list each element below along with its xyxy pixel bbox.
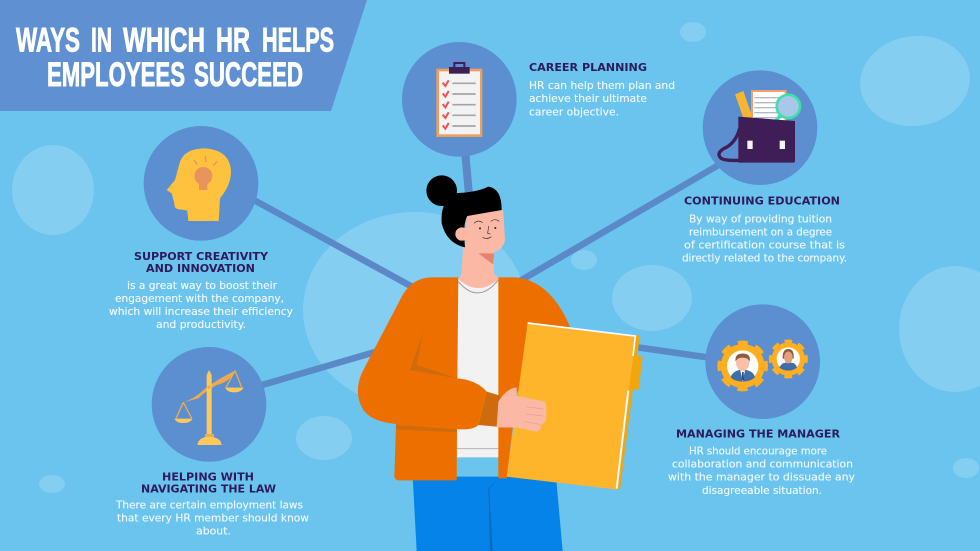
text: support creativity: which will increase their efficiency xyxy=(109,306,293,318)
title: SUCCEED xyxy=(194,56,303,94)
text: navigating the law xyxy=(115,470,309,538)
text: navigating the law: NAVIGATING THE LAW xyxy=(141,482,276,496)
text: managing the manager: disagreeable situation. xyxy=(702,485,822,497)
text: managing the manager: HR should encourage more xyxy=(689,446,827,458)
panel: career planning icon xyxy=(402,42,517,157)
text: navigating the law: that every HR member should know xyxy=(117,512,309,524)
title: HR xyxy=(216,22,250,60)
text: support creativity: engagement with the company, xyxy=(115,293,284,305)
text: continuing education xyxy=(682,194,847,264)
text: navigating the law: about. xyxy=(196,526,231,538)
title xyxy=(16,22,334,94)
title: EMPLOYEES xyxy=(47,56,185,94)
text: managing the manager xyxy=(668,428,855,497)
text: career planning: HR can help them plan and xyxy=(529,80,675,92)
folder xyxy=(507,323,643,489)
text: support creativity xyxy=(109,250,293,331)
panel: managing the manager icon xyxy=(705,304,820,419)
hand xyxy=(497,387,546,432)
text: continuing education: directly related to the company. xyxy=(682,252,847,264)
text: career planning: achieve their ultimate xyxy=(529,93,647,105)
text: navigating the law: There are certain employment laws xyxy=(115,500,303,512)
text: managing the manager: MANAGING THE MANAGER xyxy=(676,428,841,440)
panel: creativity icon xyxy=(144,126,258,241)
text: career planning: CAREER PLANNING xyxy=(529,61,647,74)
text: continuing education: reimbursement on a degree xyxy=(689,226,832,238)
text: continuing education: of certification course that is xyxy=(684,240,845,252)
shirt xyxy=(457,278,499,457)
text: continuing education: By way of providing tuition xyxy=(689,214,832,226)
panel: continuing education icon xyxy=(703,70,817,185)
text: support creativity: SUPPORT CREATIVITY xyxy=(134,250,269,263)
title: WHICH xyxy=(123,22,205,60)
text: career planning: career objective. xyxy=(529,106,619,118)
title banner xyxy=(0,0,367,111)
text: support creativity: and productivity. xyxy=(156,319,246,331)
text: support creativity: is a great way to boost their xyxy=(127,280,278,292)
text: career planning xyxy=(529,61,675,118)
title: HELPS xyxy=(262,22,334,60)
jacket xyxy=(358,277,570,480)
head and neck xyxy=(426,175,505,293)
title: WAYS xyxy=(16,22,80,60)
text: support creativity: AND INNOVATION xyxy=(146,262,255,275)
text: managing the manager: collaboration and communication xyxy=(672,458,853,470)
text: managing the manager: with the manager to dissuade any xyxy=(668,472,855,484)
person holding folder xyxy=(358,175,643,551)
panel: law icon xyxy=(152,347,266,462)
pants xyxy=(413,477,563,551)
title: IN xyxy=(91,22,112,60)
text: navigating the law: HELPING WITH xyxy=(162,470,254,484)
text: continuing education: CONTINUING EDUCATION xyxy=(684,194,840,208)
